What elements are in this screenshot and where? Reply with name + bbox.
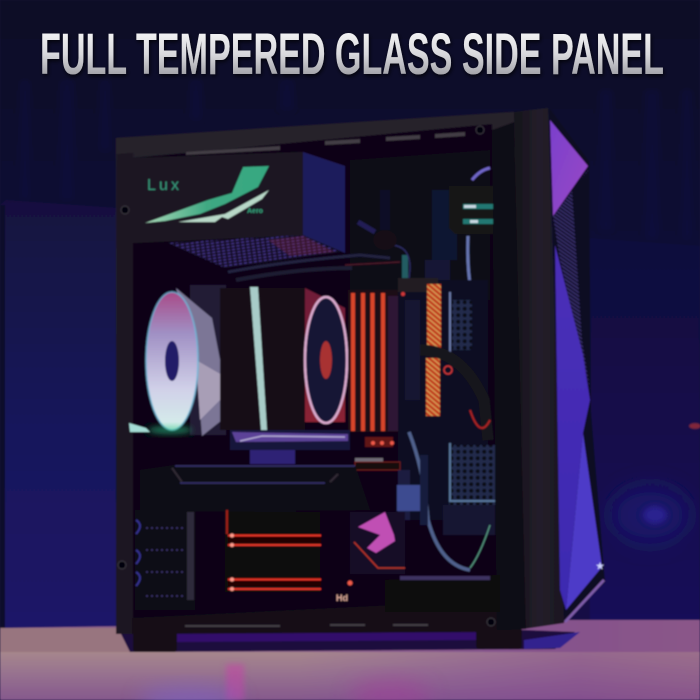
expansion slots (225, 510, 352, 603)
green stripes (145, 166, 269, 223)
lower right board edge (385, 575, 500, 612)
front column (514, 108, 564, 629)
blue cable (409, 432, 470, 570)
chipset glow (230, 430, 428, 525)
power supply (133, 152, 345, 268)
onboard debug readout: Hd (336, 593, 348, 603)
computer case (116, 108, 605, 652)
table (0, 620, 700, 700)
left RGB fan (129, 285, 226, 436)
lower bay vents (135, 510, 195, 610)
vertical cables (468, 236, 486, 350)
feet (133, 628, 522, 652)
left monitor (0, 200, 118, 640)
back interior glow (228, 150, 490, 430)
graphics card (140, 465, 370, 512)
brand mark: Aero (247, 208, 263, 215)
green wire (470, 525, 490, 568)
glass panel frame (116, 112, 526, 634)
right interior rail (492, 122, 526, 630)
CPU cooler (220, 287, 347, 430)
LUX label: Lux (147, 177, 179, 194)
right monitor (586, 238, 700, 625)
front facets (549, 108, 605, 623)
under-case shadow (120, 630, 575, 652)
AORUS shroud logo (350, 512, 405, 574)
RAM (348, 290, 398, 432)
front facets: ★ (596, 561, 605, 571)
motherboard (398, 278, 495, 535)
rear bracket with cables (449, 168, 493, 234)
